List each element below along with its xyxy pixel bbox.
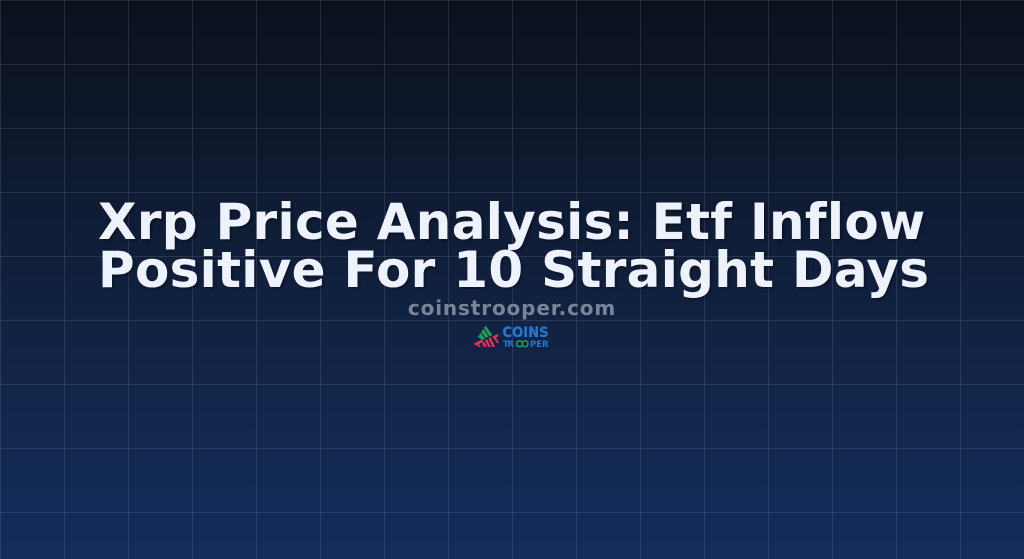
wordmark: PER: PER xyxy=(530,340,549,350)
wordmark: COINS: COINS xyxy=(502,325,548,341)
title xyxy=(98,193,929,300)
logo: Coins Trooper xyxy=(474,325,549,350)
icon: green rings xyxy=(516,341,528,347)
title: Positive For 10 Straight Days xyxy=(98,241,929,299)
wordmark: TR: TR xyxy=(503,340,514,350)
icon: green peaks xyxy=(478,326,492,340)
icon: red bars xyxy=(474,334,499,347)
website label: coinstrooper.com xyxy=(408,296,616,320)
title: Xrp Price Analysis: Etf Inflow xyxy=(98,193,925,251)
